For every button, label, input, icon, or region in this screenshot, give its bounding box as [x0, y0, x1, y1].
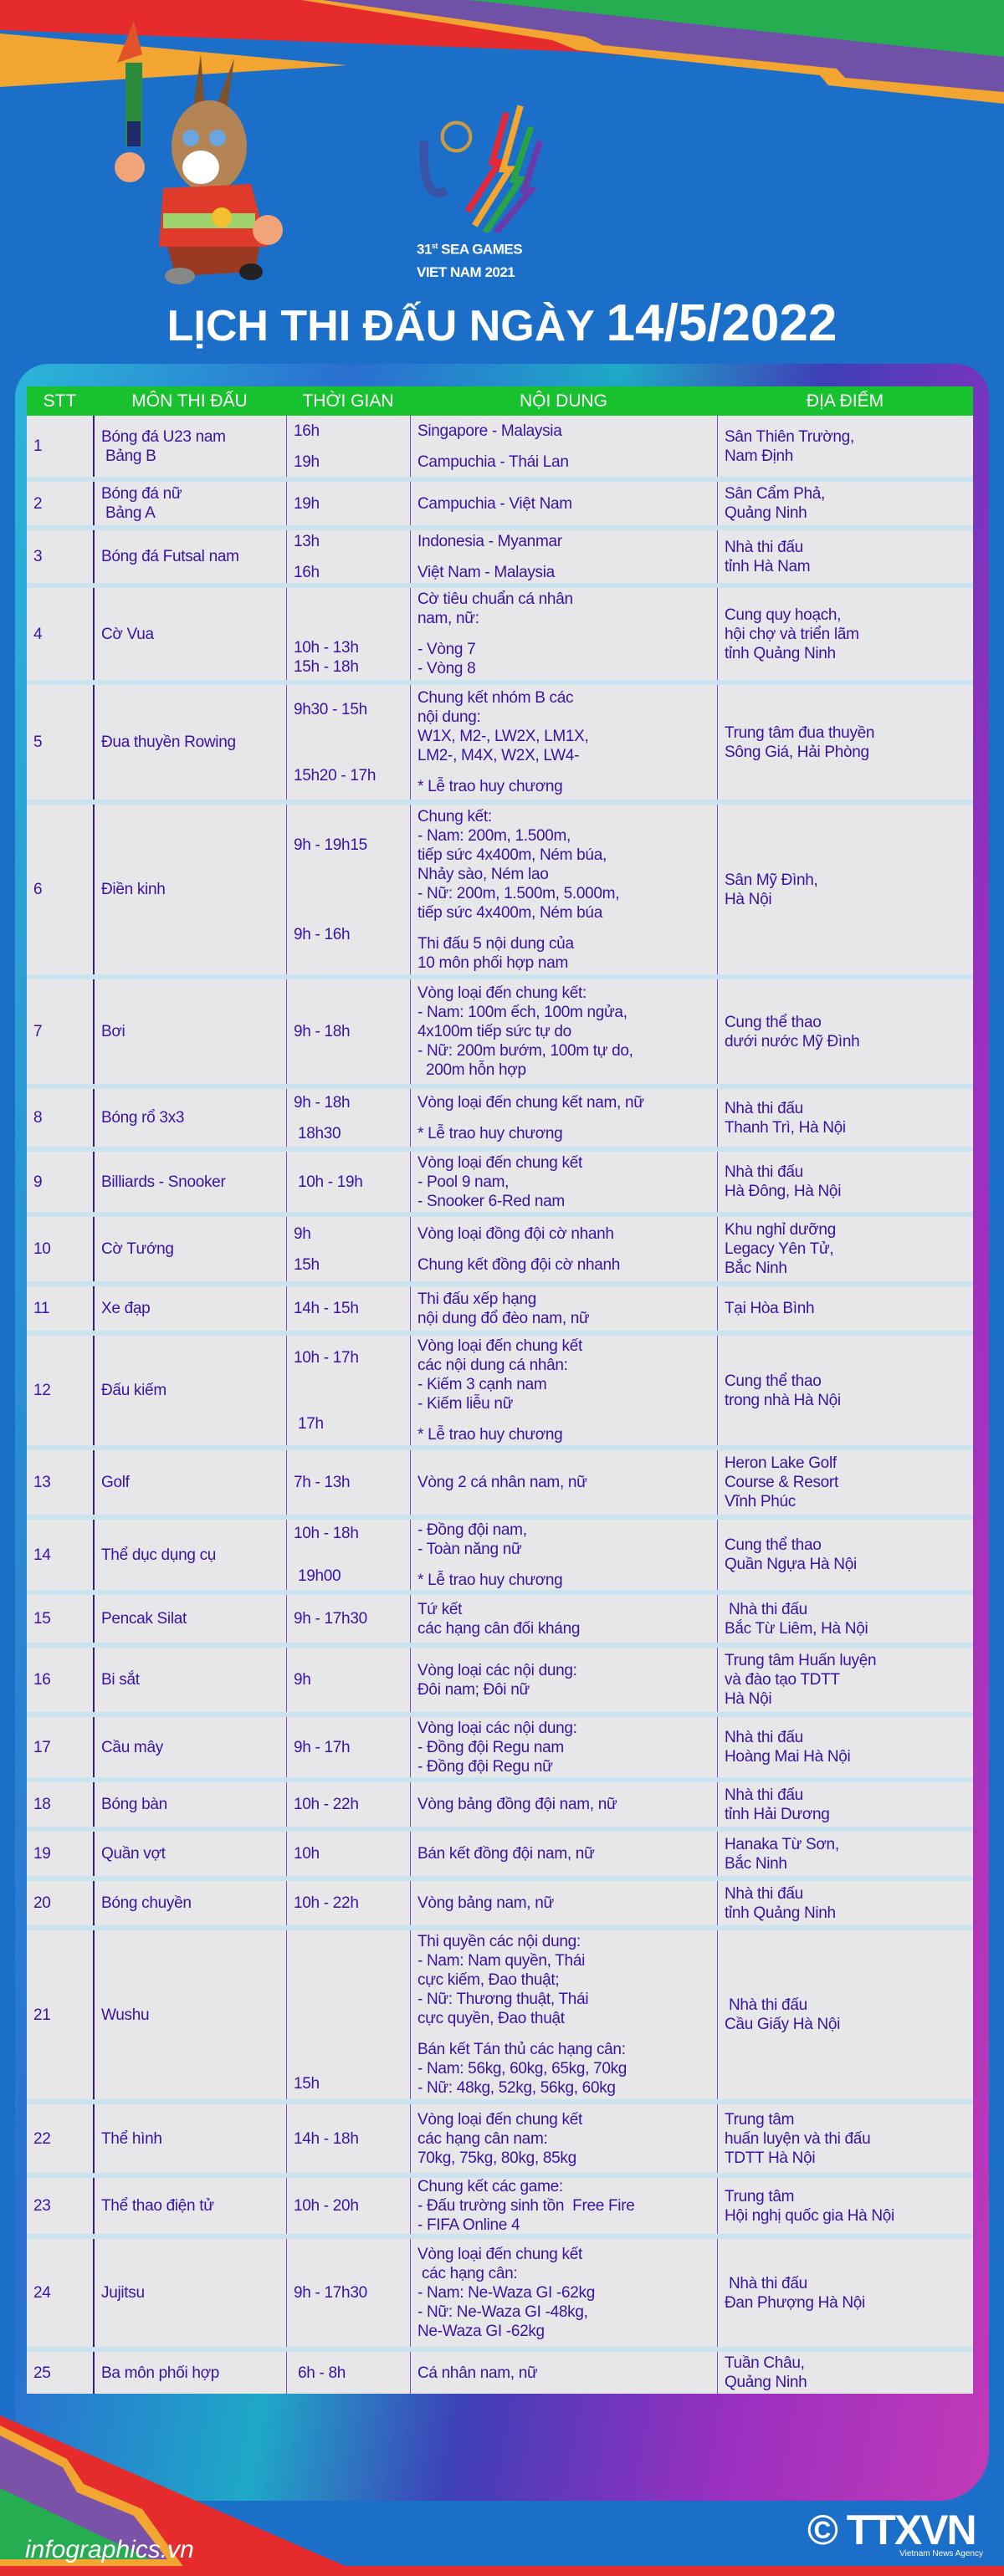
row 3: [27, 525, 973, 583]
row 7: - Nữ: 200m bướm, 100m tự do,: [417, 1042, 633, 1060]
table header: MÔN THI ĐẤU: [131, 391, 248, 410]
row 4: tỉnh Quảng Ninh: [725, 644, 836, 662]
row 23: Chung kết các game:: [417, 2178, 563, 2195]
row 7: - Nam: 100m ếch, 100m ngửa,: [417, 1004, 628, 1021]
row 23: 10h - 20h: [294, 2197, 359, 2215]
row 5: Sông Giá, Hải Phòng: [725, 743, 869, 761]
row 21: 15h: [294, 2074, 320, 2093]
table header: STT: [44, 391, 76, 410]
row 13: Golf: [101, 1474, 130, 1491]
row 6: Chung kết:: [417, 808, 492, 825]
row 22: các hạng cân nam:: [417, 2129, 547, 2148]
row 25: Ba môn phối hợp: [101, 2364, 219, 2382]
row 8: Thanh Trì, Hà Nội: [725, 1119, 846, 1136]
row 10: Legacy Yên Tử,: [725, 1240, 833, 1258]
row 24: - Nam: Ne-Waza GI -62kg: [417, 2284, 595, 2302]
row 18: Vòng bảng đồng đội nam, nữ: [417, 1796, 617, 1813]
row 17: [27, 1712, 973, 1777]
mascot: [115, 22, 283, 284]
row 12: - Kiếm 3 cạnh nam: [417, 1376, 546, 1393]
row 7: Vòng loại đến chung kết:: [417, 984, 587, 1002]
row 24: Ne-Waza GI -62kg: [417, 2323, 545, 2340]
row 4: Cờ Vua: [101, 626, 154, 642]
row 3: tỉnh Hà Nam: [725, 557, 810, 575]
row 14: [27, 1515, 973, 1590]
row 13: [27, 1445, 973, 1515]
row 14: 14: [33, 1546, 51, 1564]
table header: THỜI GIAN: [302, 391, 393, 410]
row 4: 4: [33, 626, 42, 642]
row 21: Thi quyền các nội dung:: [417, 1933, 581, 1950]
row 10: Vòng loại đồng đội cờ nhanh Chung kết đồng đội cờ nhanh: [417, 1224, 620, 1273]
row 19: Bán kết đồng đội nam, nữ: [417, 1845, 594, 1863]
row 18: [27, 1777, 973, 1827]
row 5: Đua thuyền Rowing: [101, 733, 236, 751]
row 15: 15: [33, 1610, 51, 1628]
row 4: 15h - 18h: [294, 658, 359, 676]
row 25: Cá nhân nam, nữ: [417, 2364, 537, 2382]
row 23: Thể thao điện tử: [101, 2197, 214, 2215]
row 15: 9h - 17h30: [294, 1610, 367, 1628]
row 21: - Nam: Nam quyền, Thái: [417, 1952, 585, 1970]
row 14: 10h - 18h 19h00: [294, 1525, 359, 1585]
row 4: Cung quy hoạch,: [725, 606, 841, 624]
row 10: 10: [33, 1240, 51, 1258]
row 22: 70kg, 75kg, 80kg, 85kg: [417, 2149, 576, 2166]
row 10: 9h 15h: [294, 1224, 320, 1273]
row 25: 25: [33, 2364, 51, 2382]
row 20: tỉnh Quảng Ninh: [725, 1904, 836, 1922]
row 6: Điền kinh: [101, 881, 166, 898]
row 9: - Pool 9 nam,: [417, 1173, 509, 1191]
row 25: 6h - 8h: [298, 2364, 346, 2382]
row 24: 24: [33, 2284, 51, 2302]
row 1: Bóng đá U23 nam: [101, 428, 226, 445]
row 22: 14h - 18h: [294, 2129, 359, 2148]
row 7: 7: [33, 1023, 42, 1040]
row 1: Nam Định: [725, 447, 793, 465]
row 14: Thể dục dụng cụ: [101, 1546, 216, 1564]
row 5: W1X, M2-, LW2X, LM1X,: [417, 728, 589, 745]
row 3: Bóng đá Futsal nam: [101, 548, 239, 565]
row 20: [27, 1876, 973, 1925]
row 12: 10h - 17h 17h: [294, 1348, 359, 1432]
row 22: huấn luyện và thi đấu: [725, 2129, 870, 2148]
row 25: [27, 2347, 973, 2394]
row 2: Campuchia - Việt Nam: [417, 495, 572, 512]
row 18: tỉnh Hải Dương: [725, 1805, 830, 1823]
row 13: Vĩnh Phúc: [725, 1493, 796, 1510]
row 15: Tứ kết: [417, 1601, 462, 1618]
row 2: Quảng Ninh: [725, 504, 807, 522]
row 23: Hội nghị quốc gia Hà Nội: [725, 2206, 894, 2225]
row 5: nội dung:: [417, 708, 480, 726]
row 17: Hoàng Mai Hà Nội: [725, 1748, 850, 1766]
row 2: 2: [33, 495, 42, 512]
row 14: Cung thể thao: [725, 1536, 821, 1554]
row 10: Cờ Tướng: [101, 1240, 174, 1258]
row 12: Cung thể thao: [725, 1372, 821, 1390]
row 19: Bắc Ninh: [725, 1855, 787, 1872]
row 21: Cầu Giấy Hà Nội: [725, 2016, 840, 2033]
title: LỊCH THI ĐẤU NGÀY 14/5/2022: [167, 294, 837, 352]
row 22: Thể hình: [101, 2129, 162, 2148]
row 1: Singapore - Malaysia Campuchia - Thái Lan: [417, 422, 569, 470]
row 24: các hạng cân:: [422, 2265, 517, 2282]
row 6: Hà Nội: [725, 890, 771, 908]
row 21: - Nam: 56kg, 60kg, 65kg, 70kg: [417, 2060, 627, 2078]
row 5: Chung kết nhóm B các: [417, 689, 573, 707]
row 2: 19h: [294, 495, 320, 512]
row 11: Thi đấu xếp hạng: [417, 1290, 536, 1308]
row 24: Vòng loại đến chung kết: [417, 2246, 582, 2263]
row 15: Nhà thi đấu: [729, 1601, 807, 1618]
row 19: 19: [33, 1845, 51, 1863]
row 16: và đào tạo TDTT: [725, 1671, 840, 1689]
row 13: Vòng 2 cá nhân nam, nữ: [417, 1474, 587, 1491]
table header: NỘI DUNG: [520, 391, 607, 410]
row 24: Đan Phượng Hà Nội: [725, 2293, 865, 2312]
row 20: Nhà thi đấu: [725, 1885, 803, 1902]
row 9: [27, 1147, 973, 1212]
row 9: - Snooker 6-Red nam: [417, 1193, 565, 1209]
row 2: Bảng A: [105, 504, 155, 522]
row 21: 21: [33, 2006, 51, 2024]
row 13: 7h - 13h: [294, 1474, 350, 1491]
row 18: Bóng bàn: [101, 1796, 167, 1813]
row 7: 200m hỗn hợp: [426, 1061, 526, 1079]
logo: TTXVN: © TTXVN: [807, 2507, 976, 2553]
row 11: [27, 1281, 973, 1331]
row 8: Bóng rổ 3x3: [101, 1109, 184, 1127]
row 1: 1: [33, 437, 42, 455]
row 5: 9h30 - 15h 15h20 - 17h: [294, 701, 376, 785]
row 4: hội chợ và triển lãm: [725, 626, 859, 642]
row 16: [27, 1643, 973, 1712]
row 11: Tại Hòa Bình: [725, 1300, 814, 1317]
row 13: 13: [33, 1474, 51, 1491]
row 8: Vòng loại đến chung kết nam, nữ * Lễ trao huy chương: [417, 1094, 644, 1142]
table header: [27, 386, 973, 416]
row 12: các nội dung cá nhân:: [417, 1357, 568, 1374]
row 7: [27, 974, 973, 1084]
logo: VIET NAM 2021: [417, 264, 515, 280]
row 16: Vòng loại các nội dung:: [417, 1661, 577, 1679]
row 6: Sân Mỹ Đình,: [725, 871, 818, 888]
row 15: Pencak Silat: [101, 1610, 187, 1628]
row 20: Vòng bảng nam, nữ: [417, 1894, 554, 1912]
logo: 31st SEA GAMES: [417, 242, 522, 258]
row 12: Đấu kiếm: [101, 1382, 166, 1399]
row 12: Vòng loại đến chung kết: [417, 1337, 582, 1355]
row 18: 18: [33, 1796, 51, 1813]
row 4: - Vòng 8: [417, 660, 475, 677]
row 3: Indonesia - Myanmar Việt Nam - Malaysia: [417, 532, 562, 580]
row 13: Heron Lake Golf: [725, 1454, 837, 1472]
row 24: Jujitsu: [101, 2284, 145, 2302]
row 10: [27, 1212, 973, 1281]
row 19: Hanaka Từ Sơn,: [725, 1835, 839, 1853]
row 5: 5: [33, 733, 42, 751]
row 2: Bóng đá nữ: [101, 485, 182, 503]
row 10: Bắc Ninh: [725, 1260, 787, 1277]
row 24: [27, 2234, 973, 2347]
row 20: 20: [33, 1894, 51, 1912]
row 21: Wushu: [101, 2006, 149, 2024]
row 15: các hạng cân đối kháng: [417, 1619, 580, 1638]
row 22: Vòng loại đến chung kết: [417, 2111, 582, 2128]
row 22: TDTT Hà Nội: [725, 2149, 815, 2166]
row 24: - Nữ: Ne-Waza GI -48kg,: [417, 2303, 588, 2321]
row 8: 9h - 18h 18h30: [294, 1094, 350, 1142]
row 2: [27, 477, 973, 525]
row 12: 12: [33, 1382, 51, 1399]
row 16: 16: [33, 1671, 51, 1689]
row 3: 3: [33, 548, 42, 565]
row 11: 14h - 15h: [294, 1300, 359, 1317]
row 23: Trung tâm: [725, 2188, 794, 2205]
row 16: Hà Nội: [725, 1690, 771, 1708]
row 9: Nhà thi đấu: [725, 1163, 803, 1181]
row 12: - Kiếm liễu nữ * Lễ trao huy chương: [417, 1395, 562, 1444]
row 9: Vòng loại đến chung kết: [417, 1154, 582, 1171]
row 23: - FIFA Online 4: [417, 2216, 520, 2234]
row 21: cực quyền, Đao thuật Bán kết Tán thủ các hạng cân:: [417, 2010, 626, 2058]
row 8: [27, 1084, 973, 1147]
row 5: Trung tâm đua thuyền: [725, 724, 874, 741]
row 9: Billiards - Snooker: [101, 1173, 225, 1191]
row 12: [27, 1331, 973, 1445]
row 19: 10h: [294, 1845, 320, 1863]
row 11: 11: [33, 1300, 49, 1317]
row 14: - Toàn năng nữ * Lễ trao huy chương: [417, 1541, 562, 1589]
schedule table: [27, 386, 973, 2394]
row 24: Nhà thi đấu: [729, 2275, 807, 2292]
row 17: - Đồng đội Regu nam: [417, 1738, 564, 1756]
row 6: 6: [33, 881, 42, 898]
row 14: Quần Ngựa Hà Nội: [725, 1556, 857, 1573]
row 17: 9h - 17h: [294, 1738, 350, 1756]
table header: ĐỊA ĐIỂM: [807, 391, 884, 410]
row 23: [27, 2173, 973, 2234]
row 21: [27, 1925, 973, 2099]
row 8: 8: [33, 1109, 42, 1127]
row 17: - Đồng đội Regu nữ: [417, 1758, 553, 1775]
row 6: tiếp sức 4x400m, Ném búa Thi đấu 5 nội dung của: [417, 903, 602, 952]
row 7: dưới nước Mỹ Đình: [725, 1032, 859, 1050]
row 13: Course & Resort: [725, 1474, 838, 1491]
row 6: - Nam: 200m, 1.500m,: [417, 826, 571, 845]
row 23: 23: [33, 2197, 51, 2215]
row 11: Xe đạp: [101, 1300, 150, 1317]
row 17: Cầu mây: [101, 1738, 163, 1756]
row 21: - Nữ: 48kg, 52kg, 56kg, 60kg: [417, 2079, 616, 2097]
row 6: Nhảy sào, Ném lao: [417, 865, 548, 883]
row 6: 9h - 19h15 9h - 16h: [294, 836, 367, 943]
row 14: - Đồng đội nam,: [417, 1521, 527, 1539]
row 1: Bảng B: [105, 447, 156, 465]
row 17: 17: [33, 1738, 51, 1756]
row 16: Trung tâm Huấn luyện: [725, 1652, 876, 1669]
row 6: [27, 800, 973, 974]
row 21: Nhà thi đấu: [729, 1996, 807, 2014]
row 11: nội dung đổ đèo nam, nữ: [417, 1310, 589, 1326]
row 6: 10 môn phối hợp nam: [417, 953, 568, 972]
row 17: Nhà thi đấu: [725, 1729, 803, 1746]
row 16: Bi sắt: [101, 1671, 140, 1689]
row 22: 22: [33, 2129, 51, 2148]
row 25: Tuần Châu,: [725, 2354, 805, 2372]
row 23: - Đấu trường sinh tồn Free Fire: [417, 2197, 635, 2215]
row 7: 9h - 18h: [294, 1023, 350, 1040]
row 8: Nhà thi đấu: [725, 1099, 803, 1117]
row 21: cực kiếm, Đao thuật;: [417, 1971, 559, 1989]
row 4: Cờ tiêu chuẩn cá nhân: [417, 590, 573, 608]
row 9: 10h - 19h: [298, 1173, 363, 1191]
row 12: trong nhà Hà Nội: [725, 1392, 841, 1408]
row 7: Cung thể thao: [725, 1014, 821, 1030]
row 15: Bắc Từ Liêm, Hà Nội: [725, 1619, 868, 1638]
row 19: [27, 1827, 973, 1876]
row 15: [27, 1590, 973, 1643]
row 22: Trung tâm: [725, 2111, 794, 2128]
row 24: 9h - 17h30: [294, 2284, 367, 2302]
row 1: Sân Thiên Trường,: [725, 428, 854, 445]
row 19: Quần vợt: [101, 1845, 166, 1863]
row 1: 16h 19h: [294, 422, 320, 470]
row 5: LM2-, M4X, W2X, LW4- * Lễ trao huy chương: [417, 747, 579, 795]
row 16: 9h: [294, 1671, 311, 1689]
row 6: tiếp sức 4x400m, Ném búa,: [417, 846, 607, 863]
row 18: 10h - 22h: [294, 1796, 359, 1813]
row 20: Bóng chuyền: [101, 1894, 192, 1912]
row 6: - Nữ: 200m, 1.500m, 5.000m,: [417, 885, 619, 902]
row 4: [27, 583, 973, 680]
header stripes: [0, 0, 1004, 104]
row 25: Quảng Ninh: [725, 2374, 807, 2391]
row 10: Khu nghỉ dưỡng: [725, 1221, 836, 1239]
row 18: Nhà thi đấu: [725, 1786, 803, 1803]
row 20: 10h - 22h: [294, 1894, 359, 1912]
row 22: [27, 2099, 973, 2173]
footer text: infographics.vn: infographics.vn: [25, 2536, 194, 2563]
row 5: [27, 680, 973, 800]
row 3: Nhà thi đấu: [725, 539, 803, 555]
row 9: 9: [33, 1173, 42, 1191]
footer stripes: [0, 2415, 1004, 2576]
row 7: 4x100m tiếp sức tự do: [417, 1023, 571, 1040]
row 9: Hà Đông, Hà Nội: [725, 1183, 841, 1200]
row 4: 10h - 13h: [294, 639, 359, 657]
row 21: - Nữ: Thương thuật, Thái: [417, 1991, 588, 2008]
row 4: nam, nữ: - Vòng 7: [417, 610, 479, 658]
row 3: 13h 16h: [294, 532, 320, 580]
row 7: Bơi: [101, 1023, 125, 1040]
logo: TTXVN: Vietnam News Agency: [899, 2549, 983, 2558]
row 2: Sân Cẩm Phả,: [725, 485, 825, 503]
row 16: Đôi nam; Đôi nữ: [417, 1681, 530, 1698]
logo: [417, 105, 544, 280]
row 1: [27, 416, 973, 477]
row 17: Vòng loại các nội dung:: [417, 1720, 577, 1736]
